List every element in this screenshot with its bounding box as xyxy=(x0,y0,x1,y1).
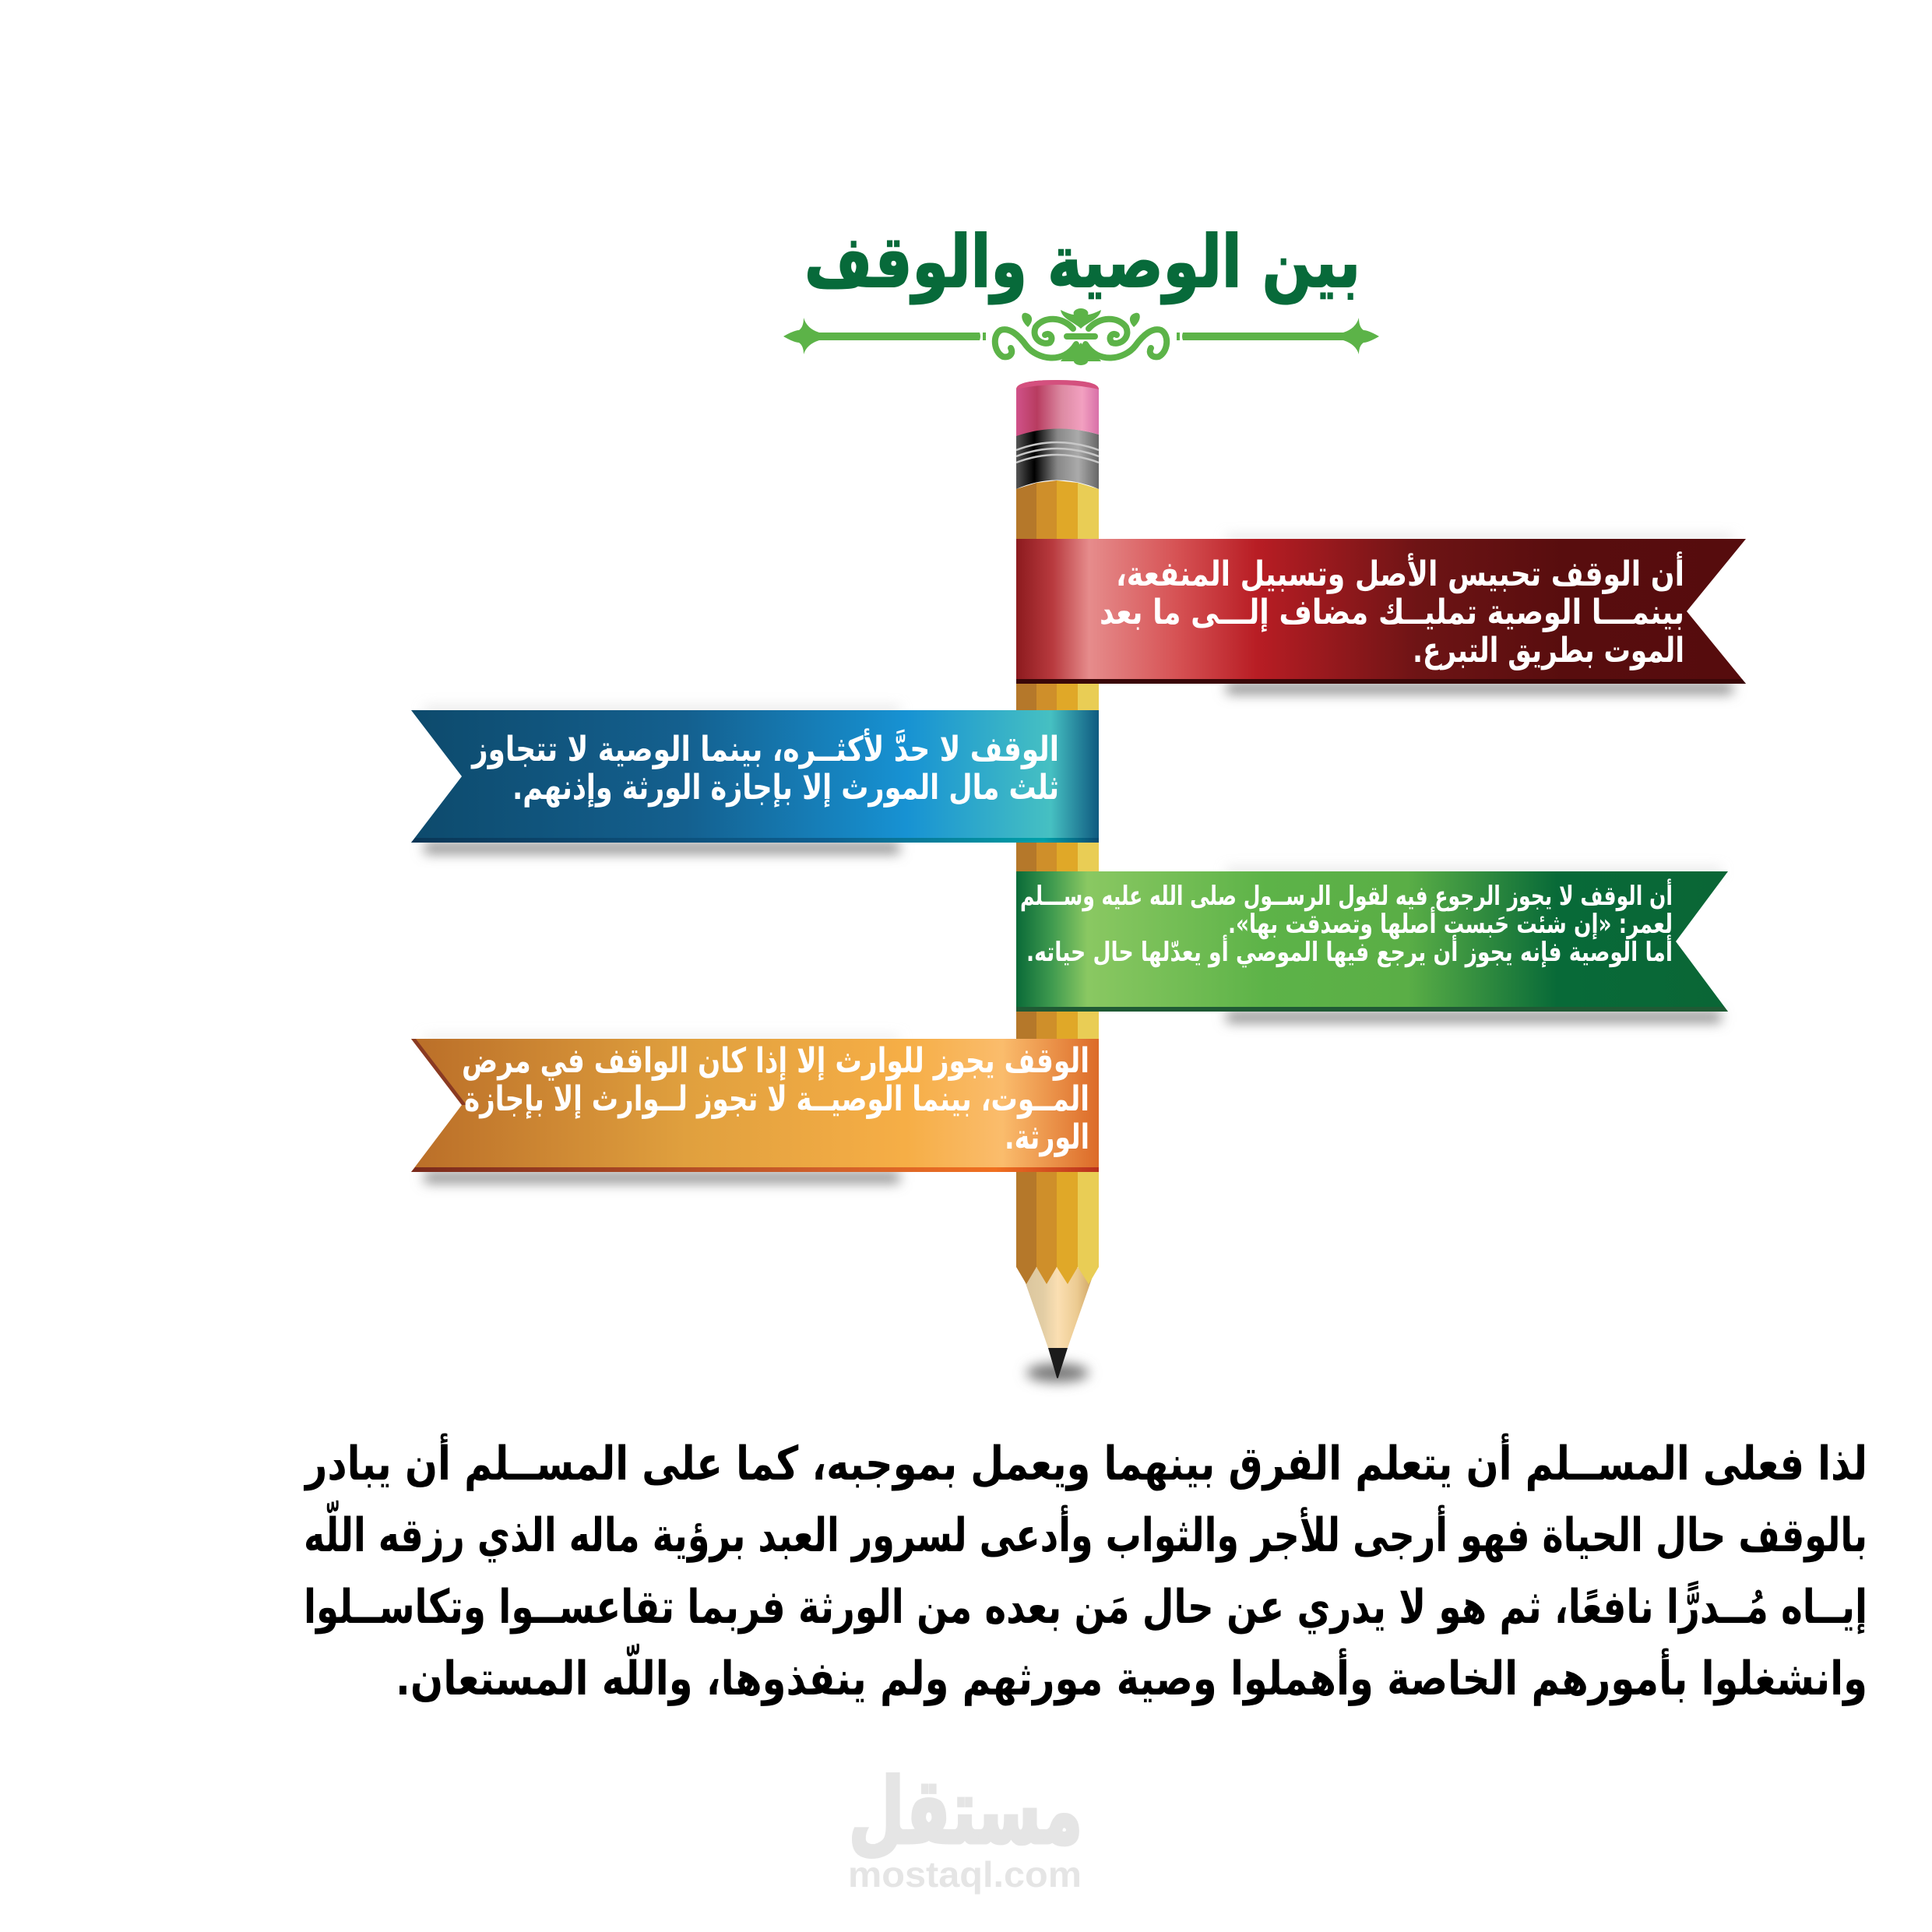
panel: orange ribbon xyxy=(411,1036,1099,1183)
ribbon text: الورثة. xyxy=(1005,1117,1089,1157)
ribbon text xyxy=(470,728,1059,808)
ribbon shape xyxy=(1016,539,1746,684)
ribbon text: بينمـــا الوصية تمليــك مضاف إلـــى ما بعد xyxy=(1100,593,1684,632)
ribbon shadow xyxy=(1226,537,1733,694)
ferrule grooves xyxy=(1016,442,1099,463)
pencil xyxy=(1016,380,1099,1382)
pencil lead xyxy=(1048,1348,1068,1378)
ribbon shadow xyxy=(1226,869,1721,1022)
ribbon text: لعمر: «إن شئت حَبست أصلها وتصدقت بها». xyxy=(1228,906,1673,940)
ribbon text: أن الوقف تحبيس الأصل وتسبيل المنفعة، xyxy=(1116,551,1684,594)
ribbon text xyxy=(1100,551,1684,670)
ribbon text: أن الوقف لا يجوز الرجوع فيه لقول الرســول صلى الله عليه وســـلم xyxy=(1020,878,1673,912)
title: بين الوصية والوقف xyxy=(804,220,1360,304)
ribbon text xyxy=(462,1041,1089,1157)
ribbon text: الموت بطريق التبرع. xyxy=(1413,631,1684,670)
ribbon shape xyxy=(411,1039,1099,1172)
ribbon shadow xyxy=(424,1036,899,1183)
watermark: مستقل xyxy=(849,1760,1082,1864)
ribbon shape xyxy=(411,710,1099,843)
conclusion paragraph xyxy=(304,1433,1867,1706)
pencil ferrule xyxy=(1016,428,1099,489)
pencil body facets xyxy=(1016,480,1099,1284)
ribbon text: أما الوصية فإنه يجوز أن يرجع فيها الموصي أو يعدّلها حال حياته. xyxy=(1026,934,1673,968)
pencil eraser xyxy=(1016,380,1099,436)
ribbon text: الوقف لا حدَّ لأكثــره، بينما الوصية لا تتجاوز xyxy=(470,728,1059,769)
ribbon text: ثلث مال المورث إلا بإجازة الورثة وإذنهم. xyxy=(512,768,1059,808)
pencil tip shadow xyxy=(1026,1364,1089,1382)
watermark: mostaql.com xyxy=(848,1854,1082,1895)
panel: green ribbon xyxy=(1016,869,1728,1022)
ribbon text xyxy=(1020,878,1673,968)
ribbon shape xyxy=(1016,871,1728,1012)
ribbon shadow xyxy=(424,708,899,853)
ribbon text: الوقف يجوز للوارث إلا إذا كان الواقف في مرض xyxy=(462,1041,1089,1081)
pencil wood cone xyxy=(1020,1268,1096,1348)
ribbon text: المــوت، بينما الوصيــة لا تجوز لــوارث إلا بإجازة xyxy=(464,1079,1089,1119)
watermark xyxy=(848,1760,1082,1895)
panel: red ribbon xyxy=(1016,537,1746,694)
ornament divider xyxy=(783,308,1379,365)
panel: blue ribbon xyxy=(411,708,1099,853)
